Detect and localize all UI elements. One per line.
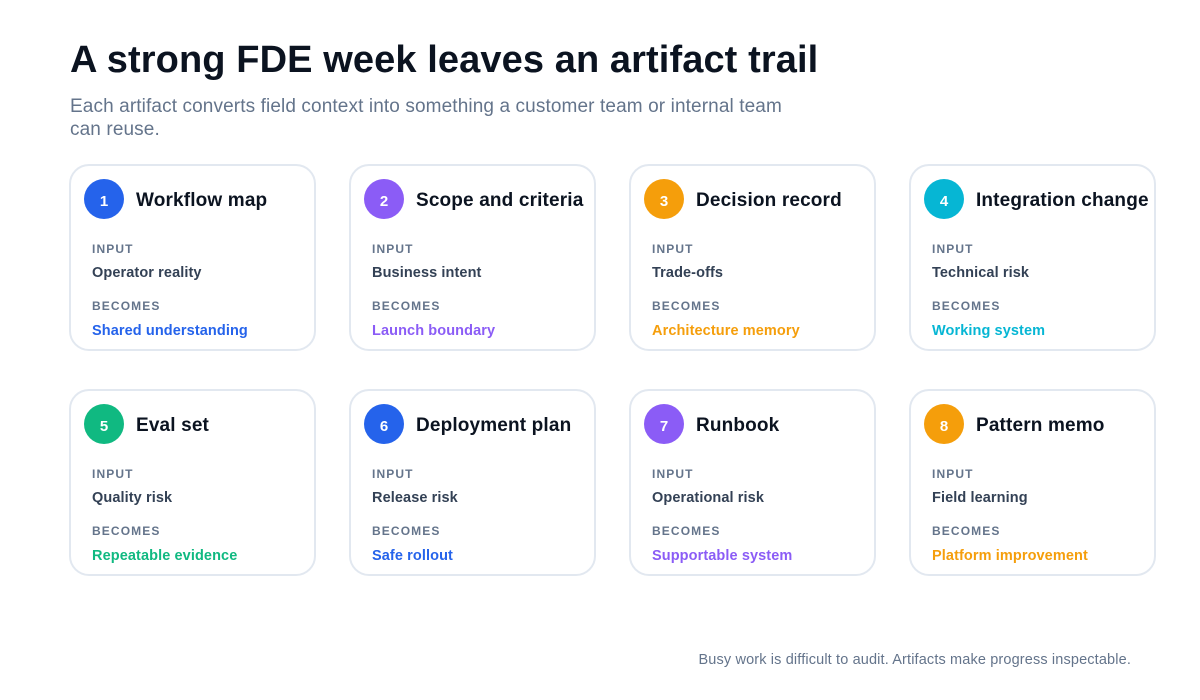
panel: runbook: Supportable system [652, 548, 792, 564]
panel: eval set [69, 389, 316, 576]
panel: deployment plan [349, 389, 596, 576]
panel: eval set: INPUT [92, 467, 134, 481]
panel: integration change: INPUT [932, 242, 974, 256]
panel: workflow map: 1 [100, 193, 108, 210]
panel: pattern memo: INPUT [932, 467, 974, 481]
panel: decision record: Architecture memory [652, 323, 800, 339]
panel: eval set: Eval set [136, 415, 209, 436]
panel: decision record: Trade-offs [652, 265, 723, 281]
panel: runbook: BECOMES [652, 524, 721, 538]
panel: eval set: Quality risk [92, 490, 172, 506]
footer note: Busy work is difficult to audit. Artifacts make progress inspectable. [698, 652, 1131, 668]
panel: decision record: 3 [660, 193, 668, 210]
panel: decision record [629, 164, 876, 351]
panel: pattern memo: Platform improvement [932, 548, 1088, 564]
panel: deployment plan: 6 [380, 418, 388, 435]
panel: eval set: 5 [100, 418, 108, 435]
panel: integration change: Integration change [976, 190, 1149, 211]
panel: integration change: Technical risk [932, 265, 1029, 281]
subtitle: Each artifact converts field context into something a customer team or internal team [70, 96, 782, 117]
panel: workflow map: Workflow map [136, 190, 267, 211]
subtitle [70, 96, 782, 140]
panel: scope and criteria [349, 164, 596, 351]
panel: integration change [909, 164, 1156, 351]
title: A strong FDE week leaves an artifact trail [70, 39, 818, 81]
panel: integration change: BECOMES [932, 299, 1001, 313]
panel: runbook: 7 [660, 418, 668, 435]
panel: runbook: INPUT [652, 467, 694, 481]
panel: workflow map: Operator reality [92, 265, 202, 281]
panel: scope and criteria: Scope and criteria [416, 190, 583, 211]
panel: scope and criteria: 2 [380, 193, 388, 210]
subtitle: can reuse. [70, 119, 160, 140]
panel: pattern memo: Pattern memo [976, 415, 1105, 436]
panel: eval set: BECOMES [92, 524, 161, 538]
panel: decision record: BECOMES [652, 299, 721, 313]
panel: pattern memo: BECOMES [932, 524, 1001, 538]
panel: eval set: Repeatable evidence [92, 548, 237, 564]
panel: scope and criteria: Business intent [372, 265, 481, 281]
panel: pattern memo: 8 [940, 418, 948, 435]
panel: deployment plan: INPUT [372, 467, 414, 481]
panel: scope and criteria: BECOMES [372, 299, 441, 313]
panel: deployment plan: Safe rollout [372, 548, 453, 564]
panel: pattern memo: Field learning [932, 490, 1028, 506]
panel: pattern memo [909, 389, 1156, 576]
panel: decision record: Decision record [696, 190, 842, 211]
panel: runbook: Runbook [696, 415, 779, 436]
panel: workflow map: BECOMES [92, 299, 161, 313]
panel: scope and criteria: INPUT [372, 242, 414, 256]
panel: scope and criteria: Launch boundary [372, 323, 495, 339]
panel: deployment plan: Deployment plan [416, 415, 571, 436]
panel: deployment plan: Release risk [372, 490, 458, 506]
panel: integration change: Working system [932, 323, 1045, 339]
panel: runbook [629, 389, 876, 576]
panel: runbook: Operational risk [652, 490, 764, 506]
panel: deployment plan: BECOMES [372, 524, 441, 538]
panel: workflow map: INPUT [92, 242, 134, 256]
panel: workflow map: Shared understanding [92, 323, 248, 339]
panel: decision record: INPUT [652, 242, 694, 256]
panel: workflow map [69, 164, 316, 351]
panel: integration change: 4 [940, 193, 948, 210]
